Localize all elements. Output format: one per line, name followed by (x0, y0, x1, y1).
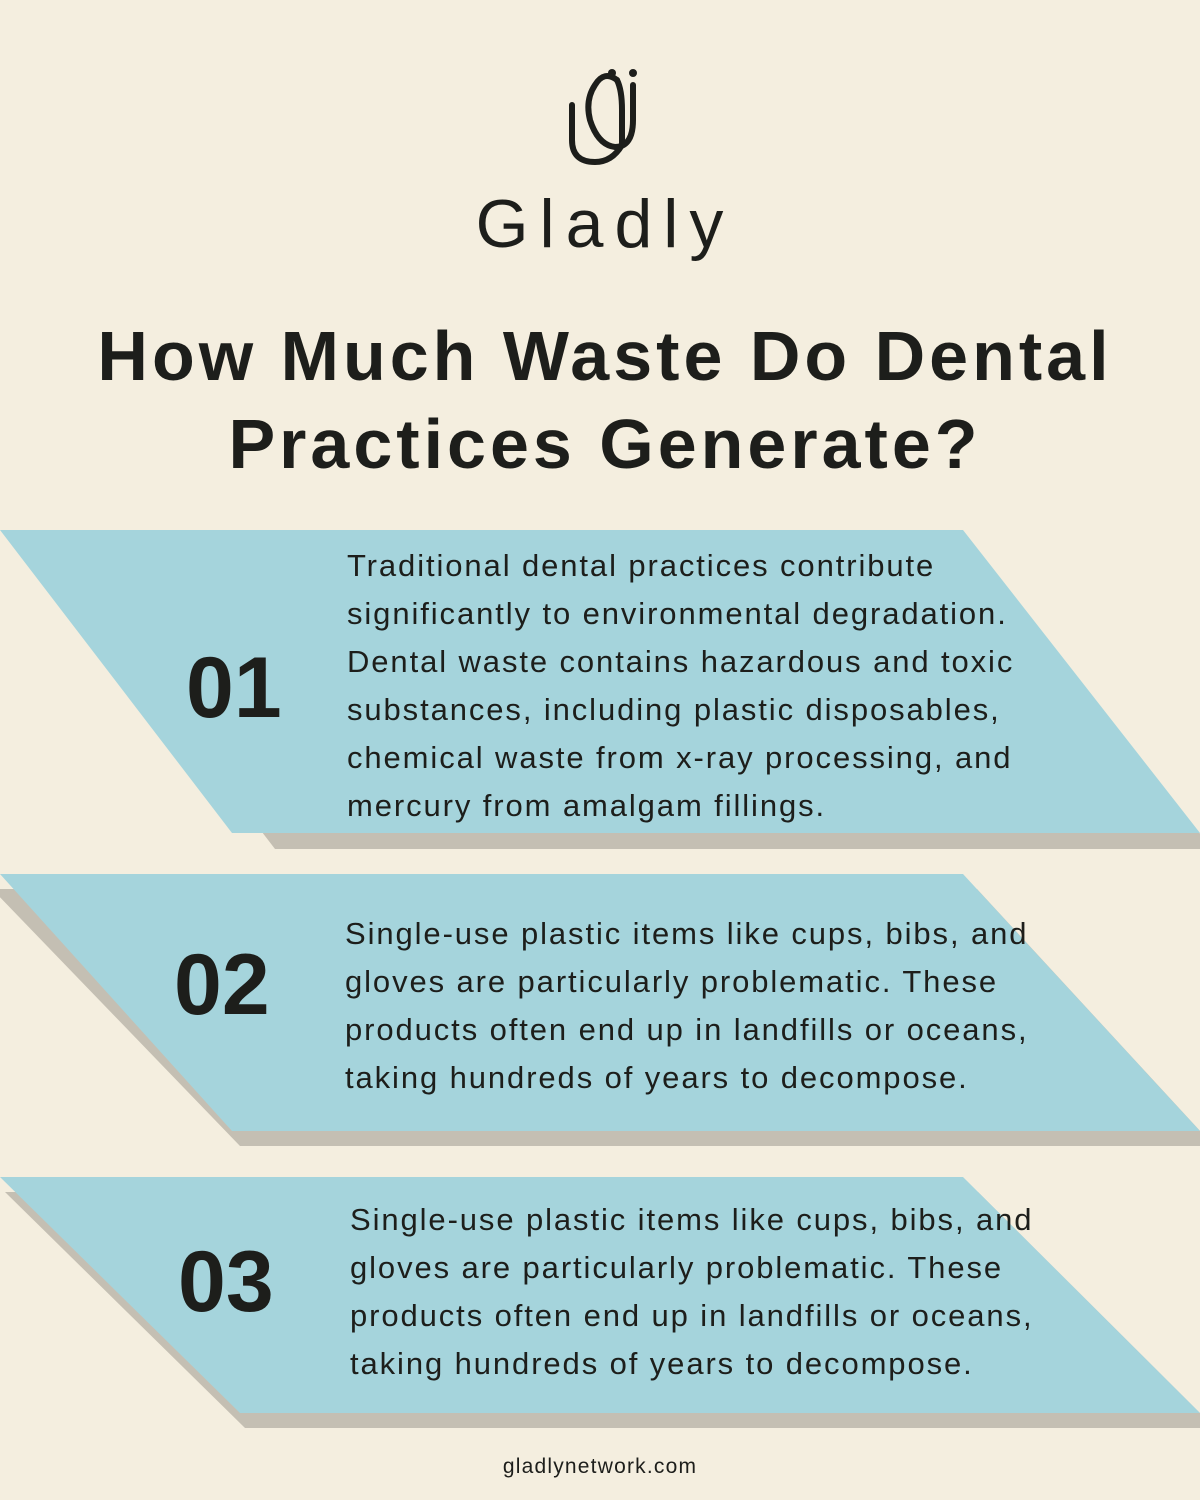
panel 1 number: 01 (186, 640, 282, 736)
panel 3 text: Single-use plastic items like cups, bibs, and (350, 1202, 1033, 1237)
brand name: Gladly (476, 186, 734, 262)
panel 3 text: gloves are particularly problematic. These (350, 1250, 1003, 1285)
panel 2 text: gloves are particularly problematic. These (345, 964, 998, 999)
panel 1 text: substances, including plastic disposables, (347, 692, 1001, 727)
footer url: gladlynetwork.com (503, 1455, 697, 1478)
panel 3 text: taking hundreds of years to decompose. (350, 1346, 974, 1381)
title: How Much Waste Do Dental (97, 317, 1113, 395)
panel 1 text (347, 548, 1014, 823)
panel 1 text: Dental waste contains hazardous and toxic (347, 644, 1014, 679)
title: Practices Generate? (228, 405, 982, 483)
panel 1 shape (0, 530, 1200, 849)
panel 1 text: Traditional dental practices contribute (347, 548, 935, 583)
panel 2 shape (0, 874, 1200, 1146)
icon: logo (569, 69, 637, 165)
panel 1 text: chemical waste from x-ray processing, and (347, 740, 1012, 775)
panel 3 shape (0, 1177, 1200, 1428)
panel 2 text: Single-use plastic items like cups, bibs, and (345, 916, 1028, 951)
panel 3 text: products often end up in landfills or oceans, (350, 1298, 1034, 1333)
panel 3 number: 03 (178, 1234, 274, 1330)
title (97, 317, 1113, 483)
panel 1 text: mercury from amalgam fillings. (347, 788, 826, 823)
panel 1 text: significantly to environmental degradation. (347, 596, 1008, 631)
panel 2 text: products often end up in landfills or oceans, (345, 1012, 1028, 1047)
panel 3 text (350, 1202, 1034, 1381)
panel 2 text: taking hundreds of years to decompose. (345, 1060, 969, 1095)
panel 2 text (345, 916, 1028, 1095)
panel 2 number: 02 (174, 937, 270, 1033)
